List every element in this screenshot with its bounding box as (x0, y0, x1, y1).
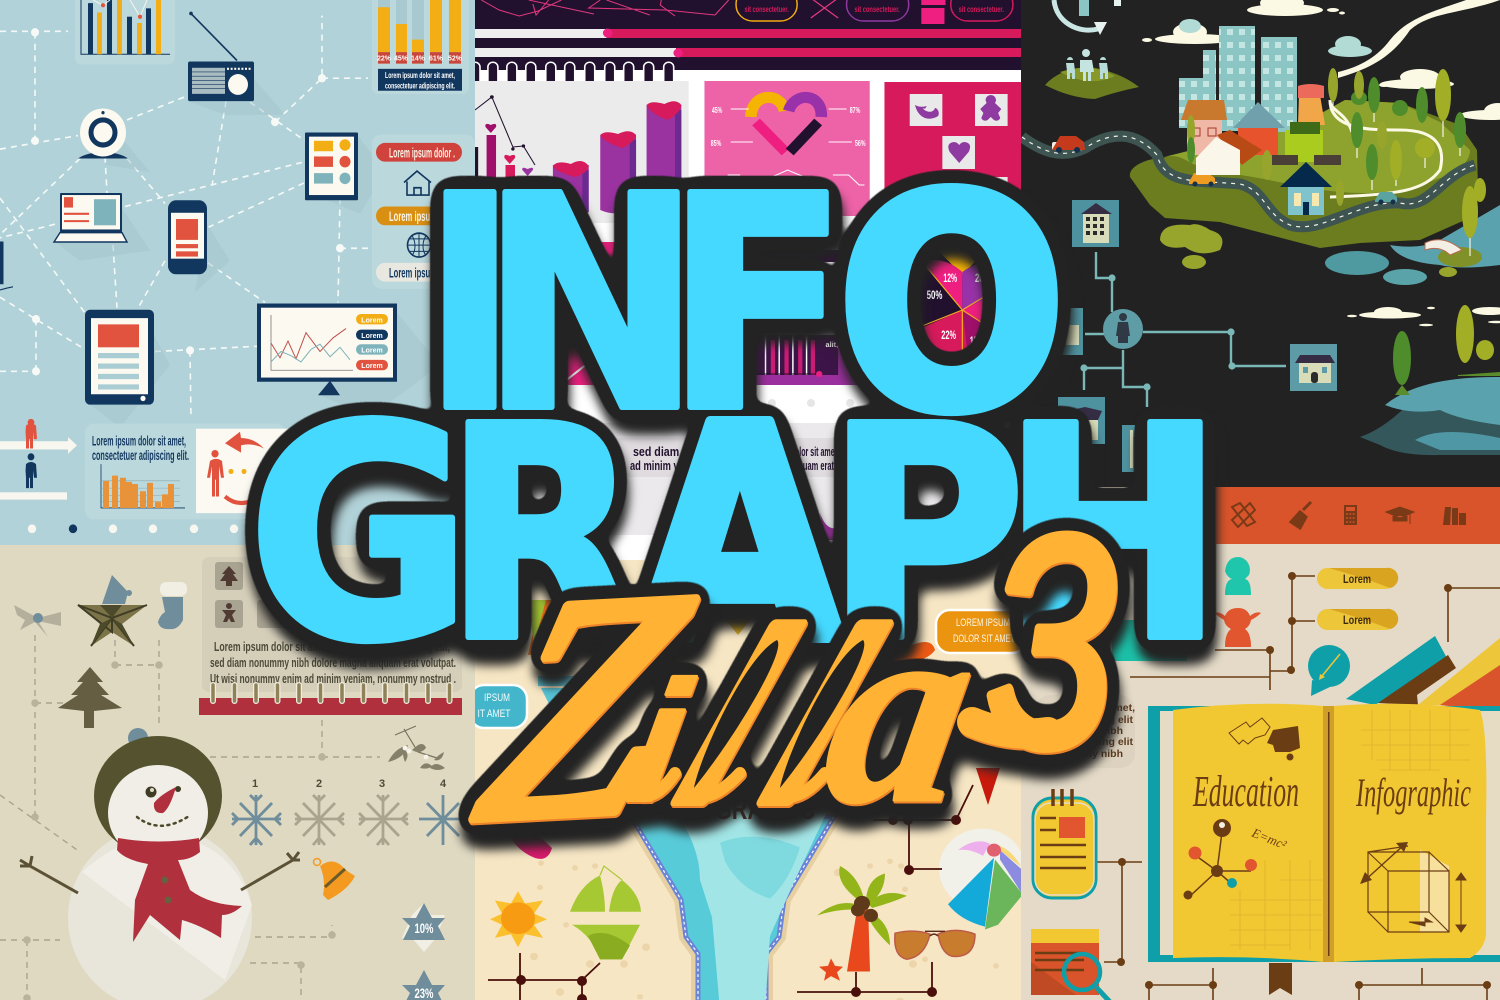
card: percentage columns: 52% (448, 54, 463, 63)
letter group: Zilla: l (632, 586, 837, 854)
spiral binding (475, 67, 669, 84)
labels in rounded outlines (736, 0, 1013, 24)
clouds (1142, 0, 1500, 326)
letter group: Zilla (451, 525, 995, 888)
icon: monitor with line chart: Lorem (361, 346, 383, 355)
book title: Education: Education (1192, 767, 1299, 816)
text card with icons: sed diam nonummy nibh dolore magna aliquam erat volutpat. (210, 655, 456, 670)
open book (1148, 704, 1500, 962)
swimming pool (631, 805, 834, 1000)
letter group: Zilla: a (808, 560, 995, 859)
lake with reeds and trees (1360, 305, 1500, 455)
icon: bow knot (33, 613, 43, 623)
text card with icons: Lorem ipsum dolor sit amet, consectetuer adipiscing elit, (214, 639, 450, 654)
icon: pie chart with percentages (920, 252, 983, 352)
sand speckles (530, 859, 999, 1000)
pink panel: heart ring chart: 85% (711, 139, 722, 148)
blue label pill: IPSUM (484, 692, 510, 704)
icon: star with hat (78, 575, 147, 646)
icon: star tag 23% (402, 970, 445, 1000)
icon: building tile (1072, 200, 1119, 247)
orange label pill (936, 610, 1026, 653)
top-left bar chart card (75, 0, 175, 65)
card: pills with icons: Lorem ipsum (389, 209, 437, 224)
icon: monitor with line chart: Lorem (361, 316, 383, 324)
text block near the numeral: nonummy nibh (1048, 748, 1123, 760)
text block near the numeral: amet, (1108, 702, 1135, 714)
title: INFO GRAPH block letters (247, 133, 1224, 707)
snowflakes with numbers: 4 (440, 778, 447, 790)
card: pills with icons: Lorem ipsum dolor . (389, 145, 455, 161)
word: GRAPH: G (247, 365, 472, 707)
letter group: Zilla: i (603, 647, 719, 837)
village houses (1181, 84, 1341, 215)
circular arrow and people on mound (1045, 0, 1139, 99)
label pills (1317, 568, 1398, 630)
icon: smartphone (168, 200, 207, 274)
word: INFO: O (836, 133, 1067, 477)
icon: webcam (78, 108, 128, 159)
labels in rounded outlines: sit consectetuer. (854, 5, 900, 14)
icon: sunglasses (895, 930, 975, 959)
flip flop (507, 820, 552, 859)
icon: mistletoe (388, 726, 445, 770)
word: INFO: F (665, 134, 849, 477)
card: percentage columns: Lorem ipsum dolor sit amet, (385, 71, 455, 80)
icon: palm tree (817, 866, 907, 971)
icon: monitor with line chart: Lorem (361, 362, 383, 370)
text block near the numeral: my nibh (1083, 725, 1123, 737)
icon: laptop (54, 193, 127, 242)
pink panel: heart ring chart: 45% (712, 106, 723, 115)
icon: mitten (158, 582, 187, 629)
labels in rounded outlines: sit consectetuer. (959, 5, 1004, 14)
teal cloud (1179, 19, 1372, 57)
infographic heading: INFOGRAPHIC (663, 793, 815, 826)
top orange wedges (528, 600, 935, 665)
trees (1187, 68, 1486, 256)
word: INFO: I (423, 134, 518, 478)
icon: monitor with line chart: Lorem (361, 332, 383, 340)
lower magenta and purple chart pieces: alit, (826, 341, 838, 349)
label pills: Lorem (1343, 572, 1371, 586)
snowflakes with numbers: 3 (379, 778, 385, 790)
word: GRAPH: A (638, 364, 844, 707)
orange label pill: DOLOR SIT AMET (953, 633, 1015, 645)
white lower band with dots and grey text card: Lorem dolor sit amet (767, 444, 837, 459)
card: percentage columns: 45% (394, 54, 409, 63)
cream river ribbon (1338, 0, 1500, 78)
icon: bell (314, 858, 355, 900)
icon: pie chart with percentages: 12% (943, 271, 957, 285)
panel: christmas infographic (0, 545, 475, 1000)
white lower band with dots and grey text card (534, 399, 943, 540)
icon: cup (538, 676, 578, 710)
panel: technology network infographic (0, 0, 475, 545)
text card with icons (202, 557, 462, 692)
icon: house tile (1290, 344, 1337, 391)
snowflakes with numbers (232, 778, 468, 845)
text block near the numeral (1035, 695, 1135, 768)
bookmark (1269, 963, 1292, 995)
icon: large tablet (85, 310, 154, 405)
label pills: Lorem (1343, 613, 1371, 627)
icon: wireframe cube (1360, 842, 1466, 932)
grassy island (1130, 100, 1500, 285)
word: GRAPH (247, 364, 1224, 707)
teal banner behind letters (1112, 620, 1187, 661)
city towers (1179, 26, 1297, 132)
icon: notepad (1033, 789, 1096, 898)
pink panel: heart ring chart: 87% (850, 106, 861, 115)
icon: boy silhouette (1225, 557, 1251, 595)
icon: document with magnifier (1031, 929, 1110, 1000)
card: bottom text and bar chart: consectetuer adipiscing elit. (92, 448, 189, 463)
icon: pie chart with percentages: 15% (970, 334, 984, 348)
road with cars (1022, 100, 1475, 227)
word: GRAPH: R (445, 364, 640, 707)
letter group: Zilla: Z (451, 525, 719, 888)
network lines and nodes (0, 16, 368, 419)
icon: molecule (1184, 819, 1257, 900)
lower magenta and purple chart pieces (567, 242, 880, 385)
icon: bikini (570, 866, 641, 959)
numeral: 3: 3 (985, 474, 1117, 810)
icon: sun (490, 891, 547, 947)
orange header band with icons (1216, 487, 1500, 544)
card: bottom text and bar chart (85, 423, 296, 519)
icon: fir tree (58, 667, 122, 728)
white lower band with dots and grey text card: ad minim veniam, quis (630, 458, 730, 473)
snowman (20, 728, 300, 1000)
panel: beach infographic (470, 560, 1026, 1000)
connector lines (1061, 572, 1500, 1000)
coloured stripes behind book (1346, 636, 1500, 712)
grey panel: heart cylinders chart (475, 81, 689, 223)
labels in rounded outlines: sit consectetuer. (744, 5, 789, 14)
connector lines with nodes (488, 785, 973, 1000)
dark header band (475, 0, 1050, 70)
blue label pill: IT AMET (478, 708, 511, 720)
white lower band with dots and grey text card: sed diam nonummy (633, 444, 734, 459)
white lower band with dots and grey text card: magna aliquam erat (764, 458, 834, 473)
word: INFO: N (481, 133, 701, 477)
pink panel: heart ring chart (704, 81, 870, 216)
card: percentage columns: 14% (411, 54, 426, 63)
icon: bow (14, 605, 61, 637)
snowflakes with numbers: 2 (316, 778, 322, 790)
icon: red star (819, 958, 843, 981)
pagination dots (28, 524, 238, 533)
icon: pie chart with percentages: 22% (941, 328, 956, 342)
network lines with person node (1080, 252, 1286, 407)
word: GRAPH: H (1002, 364, 1224, 707)
icon: pie chart with percentages: 50% (927, 288, 942, 302)
red pennant (976, 768, 1000, 805)
partial building tiles (1058, 308, 1135, 472)
red calendar strip with rings (199, 685, 462, 715)
text card with icons: Ut wisi nonummy enim ad minim veniam, nonummy nostrud . (210, 671, 456, 686)
card: percentage columns: 22% (377, 54, 392, 63)
pink panel: heart ring chart: 56% (855, 139, 866, 148)
card: percentage columns: 61% (429, 54, 444, 63)
card: pills with icons: Lorem ipsum (389, 265, 437, 281)
icon: people on arrows (0, 242, 77, 500)
crimson panel: icon tiles (884, 82, 1021, 190)
icon: monitor with line chart (257, 304, 397, 395)
card: percentage columns: consectetuer adipiscing elit. (385, 82, 455, 91)
word: GRAPH: P (825, 364, 1026, 707)
blue label pill (470, 685, 527, 728)
icon: radio (188, 12, 254, 101)
panel: pink hearts infographic (475, 0, 1021, 560)
icon: speech bubble with brush (1308, 645, 1350, 696)
snowflakes with numbers: 1 (252, 778, 258, 790)
soft icon shadows (95, 88, 414, 422)
icon: right tablet (305, 132, 358, 200)
text block near the numeral: cing elit (1093, 714, 1133, 726)
icon: puzzle pieces (1229, 718, 1300, 760)
progress bars (475, 28, 1050, 58)
card: percentage columns (372, 0, 469, 94)
word: INFO (423, 133, 1067, 478)
icon: pie chart with percentages: 28% (975, 271, 991, 285)
icon: star tag 10% (402, 903, 445, 952)
card: bottom text and bar chart: Lorem ipsum dolor sit amet, (92, 433, 186, 448)
orange label pill: LOREM IPSUM (956, 617, 1010, 629)
pink line network (481, 0, 729, 16)
bridge (1425, 240, 1462, 255)
icon: star tag 10%: 10% (414, 920, 434, 936)
panel: education infographic (1021, 487, 1500, 1000)
letter group: Zilla: l (718, 586, 923, 854)
card: pills with icons (372, 135, 475, 289)
text block near the numeral: dipiscing elit (1069, 736, 1133, 748)
icon: girl silhouette (1214, 608, 1261, 647)
formula: E=mc² (1249, 824, 1290, 853)
icon: beach ball (939, 829, 1025, 929)
dashed connectors (0, 635, 380, 1000)
title: Zilla 3 script lettering (451, 474, 1117, 888)
panel: city and countryside map (1021, 0, 1500, 487)
